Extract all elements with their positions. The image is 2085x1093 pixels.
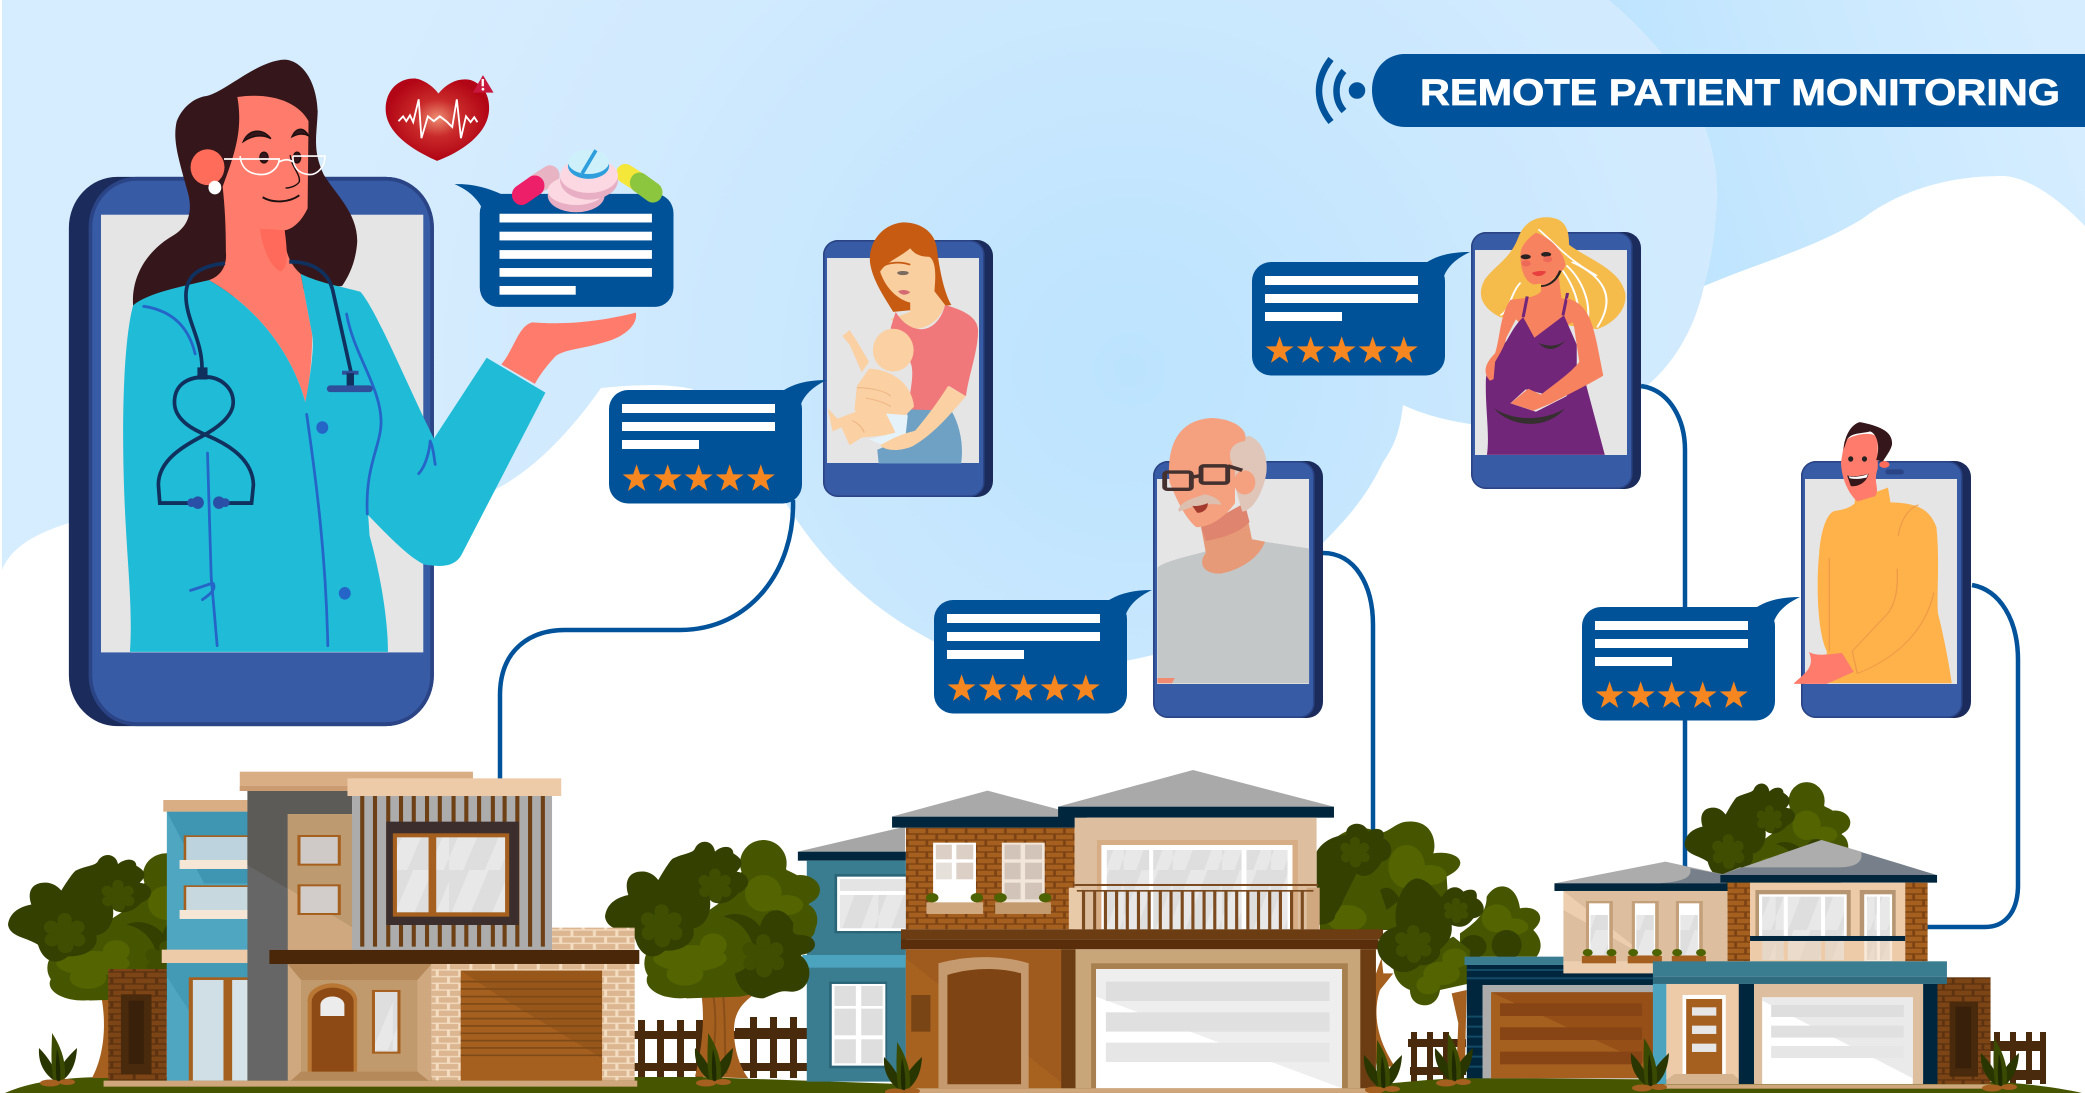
doctor phone xyxy=(69,60,673,726)
doctor speech bubble xyxy=(455,184,673,307)
dress shadow folds xyxy=(1494,339,1567,424)
ear xyxy=(1234,470,1255,494)
front tree beside house two xyxy=(1377,878,1484,1005)
skin xyxy=(209,96,312,402)
speaker xyxy=(1885,469,1904,474)
sweater seams xyxy=(1829,505,1934,674)
mother and baby xyxy=(828,222,978,463)
sweater xyxy=(1818,488,1952,683)
dress straps xyxy=(1523,293,1568,317)
young man xyxy=(1794,422,1952,684)
face and neck xyxy=(880,248,945,329)
teal wing xyxy=(798,827,906,1082)
title banner xyxy=(1319,54,2085,127)
hair xyxy=(1481,217,1625,329)
diaper xyxy=(869,414,908,445)
house two xyxy=(798,770,1383,1093)
icon: heart with ECG xyxy=(386,75,494,161)
upper right volume xyxy=(1720,840,1937,961)
neck and chest xyxy=(1505,277,1577,339)
ground xyxy=(5,1077,2082,1093)
plinth xyxy=(1663,1084,1991,1089)
plinth xyxy=(104,1081,637,1087)
young man review bubble xyxy=(1582,597,1800,720)
hair strands xyxy=(1500,229,1606,327)
hair back xyxy=(1225,436,1267,512)
arms xyxy=(1510,298,1603,411)
mother phone xyxy=(823,240,993,497)
phone body xyxy=(69,177,434,726)
garage wing xyxy=(1465,957,1653,1078)
elderly man xyxy=(1157,418,1309,683)
doctor figure xyxy=(123,60,636,652)
face features xyxy=(1847,456,1869,486)
house three xyxy=(1465,840,1991,1089)
grey tower xyxy=(247,791,354,1081)
large back tree xyxy=(1317,821,1460,932)
upper left volume xyxy=(1554,862,1728,973)
glasses xyxy=(1165,466,1242,489)
brick side tower xyxy=(108,969,167,1081)
brick parapet xyxy=(552,928,635,950)
shirt xyxy=(891,305,978,410)
coat buttons xyxy=(316,421,351,600)
trunks xyxy=(1373,958,1467,1067)
double garage xyxy=(1076,949,1376,1088)
tree behind first house xyxy=(8,853,223,1078)
glasses xyxy=(224,156,325,175)
ear and earring xyxy=(191,149,224,194)
entry and lower wall xyxy=(288,964,432,1081)
face xyxy=(1520,233,1566,284)
brick upper volume xyxy=(892,791,1087,929)
hair xyxy=(870,222,951,312)
head xyxy=(1169,418,1246,527)
mother review bubble xyxy=(609,380,827,504)
stethoscope xyxy=(158,262,373,509)
baby features xyxy=(852,388,891,432)
head xyxy=(1841,434,1878,501)
hand on belly xyxy=(1486,300,1521,381)
connector line: young man to house three xyxy=(1925,585,2018,927)
trunk xyxy=(695,980,753,1078)
pregnant woman phone xyxy=(1471,232,1641,489)
moustache xyxy=(1178,494,1221,512)
icon: pills xyxy=(522,150,653,212)
hand xyxy=(1794,652,1854,684)
house one xyxy=(104,772,639,1087)
mother arm xyxy=(880,386,966,450)
hair xyxy=(1844,422,1892,462)
ground floor xyxy=(1653,961,1991,1084)
facial features xyxy=(1521,252,1560,286)
plinth xyxy=(914,1088,1378,1093)
garage xyxy=(432,964,635,1081)
sweater xyxy=(1157,542,1309,683)
trees behind house two xyxy=(1317,821,1541,1067)
baby xyxy=(828,329,914,445)
flat roof back xyxy=(240,772,473,791)
coat seams xyxy=(144,306,435,646)
tree between houses one and two xyxy=(605,840,820,1078)
garden plants xyxy=(39,1033,2019,1093)
ear xyxy=(1879,461,1889,468)
sky background clouds xyxy=(2,0,2085,669)
blue wing xyxy=(162,800,248,1082)
jeans xyxy=(877,409,962,463)
neck shadow xyxy=(1201,503,1249,541)
tree behind third house xyxy=(1685,782,1850,910)
connector line: elderly man to house two xyxy=(1323,553,1373,840)
dress xyxy=(1486,315,1605,455)
small right tree xyxy=(1460,886,1541,960)
hand xyxy=(501,313,636,384)
young man phone xyxy=(1801,461,1971,718)
main upper volume with balcony xyxy=(901,770,1383,949)
pregnant woman review bubble xyxy=(1252,252,1470,376)
face details xyxy=(243,129,309,201)
icon: wireless signal xyxy=(1319,59,1363,122)
title text: REMOTE PATIENT MONITORING xyxy=(1420,72,2060,113)
elderly man phone xyxy=(1153,461,1323,718)
connector line: mother to house one xyxy=(500,500,793,782)
corrugated upper volume xyxy=(347,778,561,950)
coat xyxy=(123,274,545,652)
entry section xyxy=(906,949,1076,1088)
mouth xyxy=(1192,503,1208,513)
fences xyxy=(634,1017,2046,1084)
elderly man review bubble xyxy=(934,590,1152,714)
hair xyxy=(133,60,357,306)
neck xyxy=(1201,503,1265,574)
hand xyxy=(1157,678,1175,683)
facial features xyxy=(881,263,910,295)
connector line: pregnant woman to house three xyxy=(1641,386,1685,880)
pregnant woman xyxy=(1481,217,1625,455)
first floor beam xyxy=(269,950,639,964)
title pill xyxy=(1372,54,2085,127)
